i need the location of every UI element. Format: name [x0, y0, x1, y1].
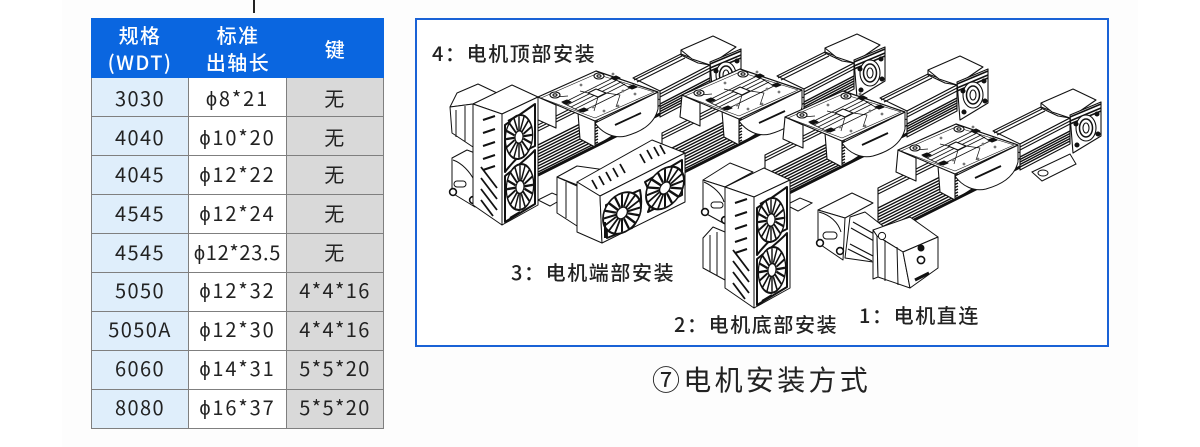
header: 标准出轴长: 标准 — [217, 20, 259, 49]
row 5050A: 4*4*16 — [299, 314, 371, 342]
row 4045: 4045 — [115, 158, 165, 188]
cap and motor behind the bottom mount cover — [702, 163, 753, 280]
row 6060: 6060 — [115, 352, 165, 382]
actuator: direct motor — [878, 89, 1101, 238]
row 5050A — [91, 312, 384, 351]
row 4545 second: 无 — [324, 236, 346, 266]
row 3030: ϕ8*21 — [206, 82, 269, 112]
row 4045: 无 — [324, 158, 346, 188]
row 5050A: 5050A — [108, 314, 172, 342]
header: 规格: 规格 — [119, 20, 161, 49]
row 8080: 5*5*20 — [299, 392, 371, 420]
panel: motor mounting frame — [415, 18, 1109, 347]
row 4045 — [91, 156, 384, 195]
motor unit: side cover top mounted — [473, 85, 538, 225]
header: 规格: (WDT) — [108, 47, 172, 76]
row 3030: 3030 — [115, 82, 165, 112]
row 4545 second: 4545 — [115, 236, 165, 266]
mounting bracket: rear — [538, 193, 812, 211]
actuator: end mounted motor — [765, 56, 988, 205]
row 4040: ϕ10*20 — [199, 122, 276, 150]
header: 键 — [287, 18, 384, 78]
motor unit: end mounted — [557, 140, 685, 243]
row 4545 — [91, 195, 384, 234]
label: 2 bottom mount: 2：电机底部安装 — [674, 309, 838, 338]
header: 规格 — [91, 18, 189, 78]
row 5050 — [91, 273, 384, 312]
row 6060: ϕ14*31 — [199, 352, 276, 382]
mounting foot — [1032, 154, 1076, 181]
motor unit: side cover bottom mounted — [725, 168, 790, 308]
motor unit: direct drive — [817, 193, 938, 288]
row 5050: ϕ12*32 — [199, 274, 276, 304]
row 8080: ϕ16*37 — [199, 392, 276, 420]
row 5050: 5050 — [115, 274, 165, 304]
spec table — [91, 18, 384, 429]
actuator: top mounted motor — [518, 36, 741, 185]
row 4545 second: ϕ12*23.5 — [194, 236, 281, 266]
connector tick — [253, 0, 255, 13]
row 8080 — [91, 390, 384, 429]
row 5050A: ϕ12*30 — [199, 314, 276, 342]
row 5050: 4*4*16 — [299, 274, 371, 304]
row 8080: 8080 — [115, 392, 165, 420]
row 4545: 4545 — [115, 198, 165, 226]
row 4040: 无 — [324, 122, 346, 150]
row 4545: ϕ12*24 — [199, 198, 276, 226]
label: 1 direct: 1：电机直连 — [859, 300, 980, 329]
row 4545 second — [91, 234, 384, 273]
header: 标准出轴长: 出轴长 — [206, 47, 270, 76]
row 4545: 无 — [324, 198, 346, 226]
row 3030 — [91, 78, 384, 117]
header: 键: 键 — [325, 34, 346, 62]
header: 标准出轴长 — [189, 18, 287, 78]
row 4040 — [91, 117, 384, 156]
row 4040: 4040 — [115, 122, 165, 150]
row 6060: 5*5*20 — [299, 352, 371, 382]
label: 3 end mount: 3：电机端部安装 — [511, 257, 675, 286]
row 6060 — [91, 351, 384, 390]
label: 4 top mount: 4：电机顶部安装 — [432, 38, 596, 67]
title: ⑦ motor mounting methods: ⑦电机安装方式 — [652, 359, 871, 399]
actuator: bottom mounted motor — [662, 34, 885, 183]
row 3030: 无 — [324, 82, 346, 112]
row 4045: ϕ12*22 — [199, 158, 276, 188]
motor and cap behind the top mount cover — [450, 84, 497, 207]
